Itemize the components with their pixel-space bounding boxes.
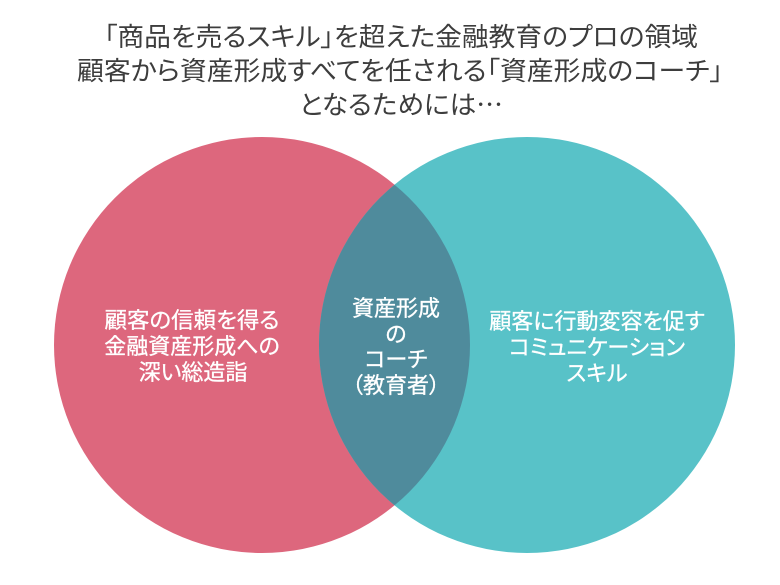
left circle label: 金融資産形成への: [104, 329, 280, 361]
overlap label: の: [385, 317, 407, 349]
title: 顧客から資産形成すべてを任される「資産形成のコーチ」: [77, 51, 723, 88]
title: となるためには…: [299, 85, 503, 122]
title: 「商品を売るスキル」を超えた金融教育のプロの領域: [104, 17, 698, 54]
overlap label: コーチ: [365, 342, 427, 374]
right circle: [319, 137, 735, 553]
left circle label: [104, 303, 280, 387]
overlap label: [352, 291, 440, 400]
venn diagram: [54, 137, 735, 553]
left circle: [54, 137, 470, 553]
overlap label: 資産形成: [352, 291, 440, 323]
right circle label: [489, 304, 705, 388]
overlap: [319, 184, 470, 506]
left circle label: 深い総造詣: [139, 355, 247, 387]
right circle label: コミュニケーション: [509, 330, 685, 362]
right circle label: 顧客に行動変容を促す: [489, 304, 705, 336]
overlap label: （教育者）: [352, 368, 440, 400]
right circle label: スキル: [567, 356, 627, 388]
title: [77, 17, 723, 122]
left circle label: 顧客の信頼を得る: [104, 303, 280, 335]
